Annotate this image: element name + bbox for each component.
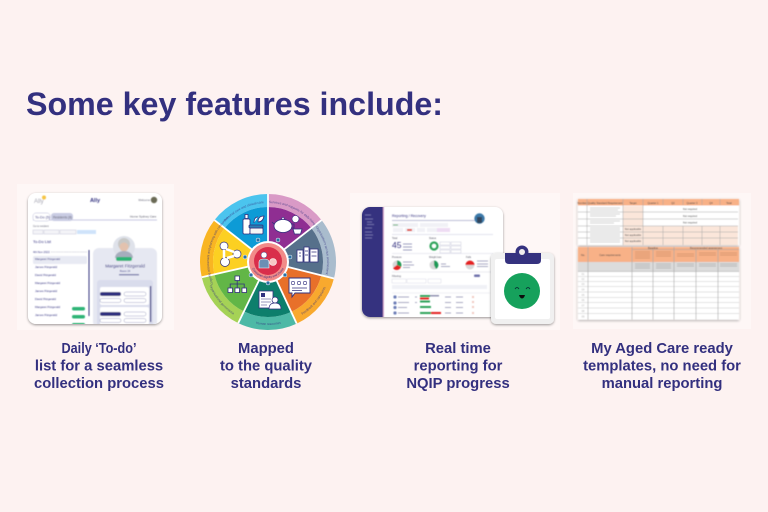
panel: to-do list screenshot: James Fitzgerald	[35, 313, 57, 317]
caption: daily to-do	[34, 341, 164, 392]
table: bottom template: 05	[582, 294, 585, 297]
panel: to-do list screenshot: Margaret Fitzgerald	[35, 257, 60, 261]
table: top template: Q2	[671, 201, 675, 205]
table: top template: Not required	[683, 207, 698, 211]
panel: NQIP reporting dashboard: Filtering	[392, 275, 402, 278]
title: Some key features include:	[26, 86, 443, 122]
chart: quality standards wheel: Personal care and clinical care	[224, 202, 264, 222]
panel: to-do list screenshot: Margaret Fitzgerald	[105, 264, 145, 268]
panel: to-do list screenshot: Margaret Fitzgerald	[35, 305, 60, 309]
caption: real time reporting: Real time	[425, 341, 491, 357]
chart: quality standards wheel	[200, 194, 336, 330]
chart: quality standards wheel: Services and supports for daily living	[269, 200, 316, 226]
table: top template	[577, 199, 739, 245]
chart: quality standards wheel: Feedback and complaints	[301, 287, 326, 315]
caption: my aged care	[583, 341, 741, 392]
panel: to-do list screenshot: Room 24	[120, 269, 131, 273]
table: bottom template: 02	[582, 278, 585, 281]
table: bottom template: Baseline	[648, 246, 659, 250]
caption: mapped: Mapped	[238, 341, 294, 357]
table: top template: Not required	[683, 220, 698, 224]
panel: to-do list screenshot: Sydney Care	[139, 214, 157, 218]
table: bottom template: 08	[582, 310, 585, 313]
chart: quality standards wheel: Organisational governance	[210, 285, 234, 314]
caption: daily to-do: collection process	[34, 376, 164, 392]
table: top template: Not applicable	[625, 239, 642, 243]
wedge: human resources	[186, 180, 350, 344]
caption: mapped: to the quality	[220, 358, 313, 374]
table: bottom template: Recommended assessment	[690, 246, 722, 250]
chart: quality standards wheel: Human resources	[256, 322, 281, 325]
table: top template: Number	[577, 201, 587, 205]
table: top template: Target	[629, 201, 637, 205]
icon: care cycle	[220, 242, 241, 266]
panel: NQIP reporting dashboard: Weight loss	[429, 256, 442, 259]
table: top template: Not required	[683, 214, 698, 218]
panel: to-do list screenshot: To-Do List	[33, 239, 52, 244]
icon: human resources document	[259, 291, 281, 309]
wedge: ongoing assessment	[194, 188, 342, 336]
panel: to-do list screenshot: David Fitzgerald	[35, 297, 56, 301]
panel: centre consumer dignity and choice: Consumer dignity and choice	[252, 268, 284, 279]
caption: my aged care: My Aged Care ready	[591, 341, 734, 357]
table: bottom template: 09	[582, 316, 585, 318]
panel: to-do list screenshot: To-Do (5)	[35, 216, 50, 220]
chart: quality standards wheel: Ongoing assessment and planning with consumers	[207, 217, 228, 285]
table: top template: Quality Standard Requirement	[588, 201, 623, 205]
caption: real time reporting	[406, 341, 510, 392]
panel: to-do list screenshot: Ally	[34, 199, 44, 205]
table: top template: Total	[726, 201, 732, 205]
table: top template: Quarter 1	[648, 201, 659, 205]
panel: NQIP reporting dashboard: Status	[429, 237, 437, 240]
table: bottom template	[578, 246, 739, 320]
panel: centre consumer dignity and choice	[247, 241, 289, 283]
panel: to-do list screenshot	[26, 192, 164, 326]
wedge: organisational governance	[186, 180, 350, 344]
panel: NQIP reporting dashboard: 45	[392, 240, 402, 250]
panel: to-do list screenshot: Residents (8)	[53, 216, 72, 220]
panel: to-do list screenshot: David Fitzgerald	[35, 273, 56, 277]
panel: NQIP reporting dashboard: Falls	[466, 256, 472, 259]
caption: my aged care: templates, no need for	[583, 358, 741, 374]
caption: real time reporting: reporting for	[414, 358, 503, 374]
panel: to-do list screenshot: Go to resident	[33, 225, 49, 228]
caption: my aged care: manual reporting	[602, 376, 722, 392]
icon: building	[297, 247, 318, 262]
panel: My Aged Care templates	[573, 193, 751, 329]
panel: NQIP reporting dashboard: Pressure	[392, 256, 402, 259]
panel: to-do list screenshot: Ally	[90, 198, 101, 204]
caption: daily to-do: list for a seamless	[35, 358, 163, 374]
panel: NQIP reporting dashboard: Reporting / Recovery	[392, 214, 426, 218]
icon: teapot	[272, 216, 302, 234]
icon: clipboard with smiley	[491, 246, 554, 324]
panel: NQIP reporting dashboard	[360, 206, 556, 326]
caption: daily to-do: Daily ‘To-do’	[62, 341, 136, 357]
wedge: services and supports	[206, 200, 330, 324]
panel: to-do list screenshot: Home	[130, 214, 138, 218]
table: bottom template: 01	[582, 273, 585, 276]
icon: pill bottle and bandage	[243, 214, 264, 234]
panel: to-do list screenshot: 4th Nov 2022	[33, 250, 50, 254]
table: bottom template: 04	[582, 288, 585, 292]
table: top template: Quarter 3	[687, 201, 698, 205]
table: top template: Not applicable	[625, 233, 642, 237]
chart: quality standards wheel: Organisation's service environment	[316, 226, 330, 274]
table: bottom template: No.	[581, 253, 585, 257]
caption: mapped: standards	[231, 376, 301, 392]
icon: organisation chart	[228, 276, 246, 292]
wedge: service environment	[182, 176, 354, 348]
panel: to-do list screenshot: James Fitzgerald	[35, 265, 57, 269]
wedge: feedback and complaints	[193, 187, 343, 337]
panel: to-do list screenshot: Welcome	[138, 198, 150, 202]
table: bottom template: Care requirements	[599, 253, 621, 257]
table: bottom template: 06	[582, 299, 585, 302]
table: bottom template: 07	[582, 304, 585, 308]
icon: feedback speech bubble	[289, 278, 310, 297]
wedge: personal and clinical care	[182, 176, 354, 348]
panel: to-do list screenshot: Margaret Fitzgerald	[35, 281, 60, 285]
panel: NQIP reporting dashboard: Total	[392, 237, 398, 240]
table: bottom template: 03	[582, 283, 585, 286]
table: top template: Q4	[709, 201, 713, 205]
caption: real time reporting: NQIP progress	[406, 376, 510, 392]
caption: mapped	[220, 341, 313, 392]
table: top template: Not applicable	[625, 227, 642, 231]
panel: to-do list screenshot: James Fitzgerald	[35, 289, 57, 293]
